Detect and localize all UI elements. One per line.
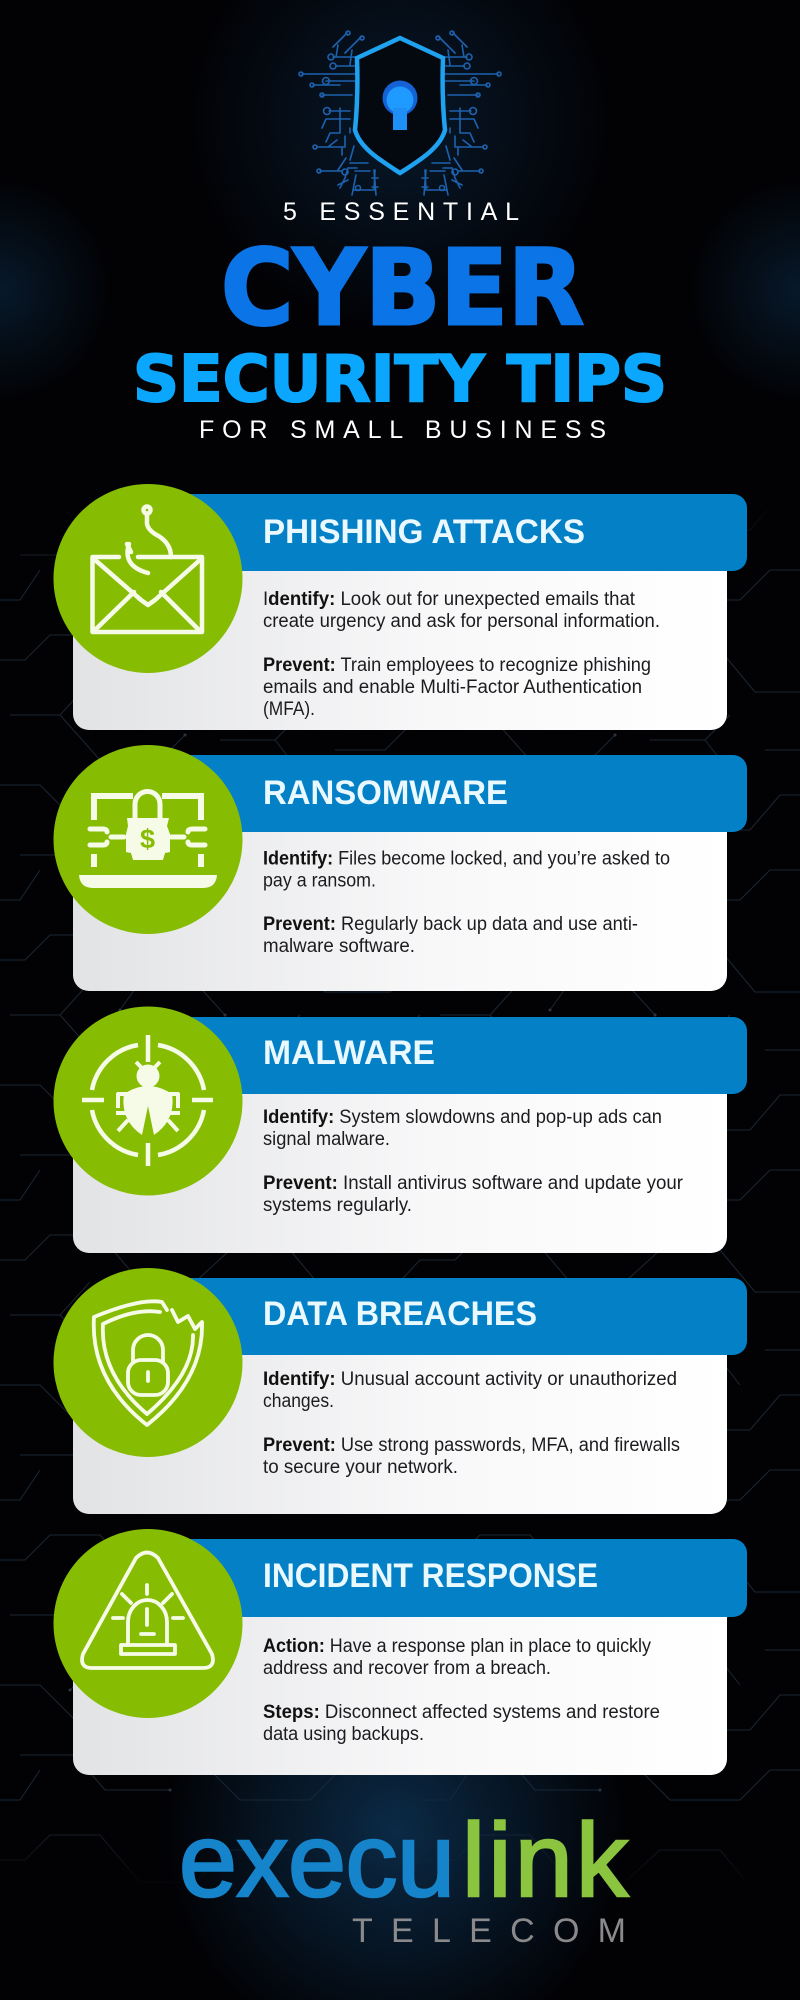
icon: broken shield with lock	[94, 1301, 202, 1425]
wordmark: execu: execu	[179, 1803, 455, 1919]
text block	[263, 1107, 684, 1216]
icon: laptop with ransom lock	[79, 792, 217, 888]
text block: data using backups.	[263, 1724, 424, 1745]
text block: create urgency and ask for personal information.	[263, 611, 660, 632]
panel: data breaches	[54, 1268, 747, 1514]
subtitle: for small business: FOR SMALL BUSINESS	[199, 416, 606, 444]
icon: laptop with ransom lock: $	[140, 824, 155, 854]
icon: circuit shield with keyhole	[299, 31, 501, 195]
heading: MALWARE	[263, 1034, 435, 1072]
text block: Identify: Look out for unexpected emails that	[263, 589, 636, 610]
text block	[263, 589, 660, 720]
text block: signal malware.	[263, 1129, 390, 1150]
wordmark: link: link	[462, 1803, 629, 1919]
text block: changes.	[263, 1391, 334, 1412]
text block: pay a ransom.	[263, 870, 376, 892]
text block: Identify: Unusual account activity or unauthorized	[263, 1369, 677, 1390]
heading: RANSOMWARE	[263, 774, 508, 812]
text block: Prevent: Install antivirus software and update your	[263, 1173, 684, 1194]
text block: Identify: System slowdowns and pop-up ads can	[263, 1107, 662, 1128]
title: security tips: SECURITY TIPS	[133, 343, 667, 417]
text block	[263, 1636, 660, 1745]
text block: malware software.	[263, 936, 415, 957]
icon: envelope with fishing hook	[92, 506, 202, 632]
heading: PHISHING ATTACKS	[263, 513, 585, 551]
title	[133, 198, 667, 444]
text block: Prevent: Train employees to recognize phishing	[263, 655, 651, 676]
icon: bug in crosshair	[82, 1035, 213, 1166]
text block: Steps: Disconnect affected systems and restore	[263, 1702, 660, 1723]
text block: emails and enable Multi-Factor Authentication	[263, 677, 642, 698]
text block: Prevent: Use strong passwords, MFA, and firewalls	[263, 1435, 680, 1456]
text block: (MFA).	[263, 699, 315, 720]
subtitle: 5 essential: 5 ESSENTIAL	[283, 198, 519, 226]
heading: DATA BREACHES	[263, 1295, 537, 1333]
text block	[263, 848, 670, 957]
panel: malware	[54, 1006, 747, 1253]
logo: execulink telecom	[179, 1803, 629, 1950]
text block: systems regularly.	[263, 1195, 412, 1216]
text block: Prevent: Regularly back up data and use anti-	[263, 914, 638, 935]
panel: ransomware	[54, 745, 747, 991]
text block: address and recover from a breach.	[263, 1658, 551, 1679]
panel: incident response	[54, 1529, 747, 1775]
text block: Action: Have a response plan in place to quickly	[263, 1636, 651, 1657]
text block: to secure your network.	[263, 1457, 458, 1478]
wordmark: telecom: TELECOM	[352, 1912, 626, 1950]
text block	[263, 1369, 680, 1478]
title: cyber: CYBER	[221, 227, 584, 349]
text block: Identify: Files become locked, and you’re asked to	[263, 848, 670, 870]
icon: alarm beacon in triangle	[82, 1552, 213, 1668]
panel: phishing attacks	[54, 484, 747, 730]
heading: INCIDENT RESPONSE	[263, 1557, 598, 1595]
